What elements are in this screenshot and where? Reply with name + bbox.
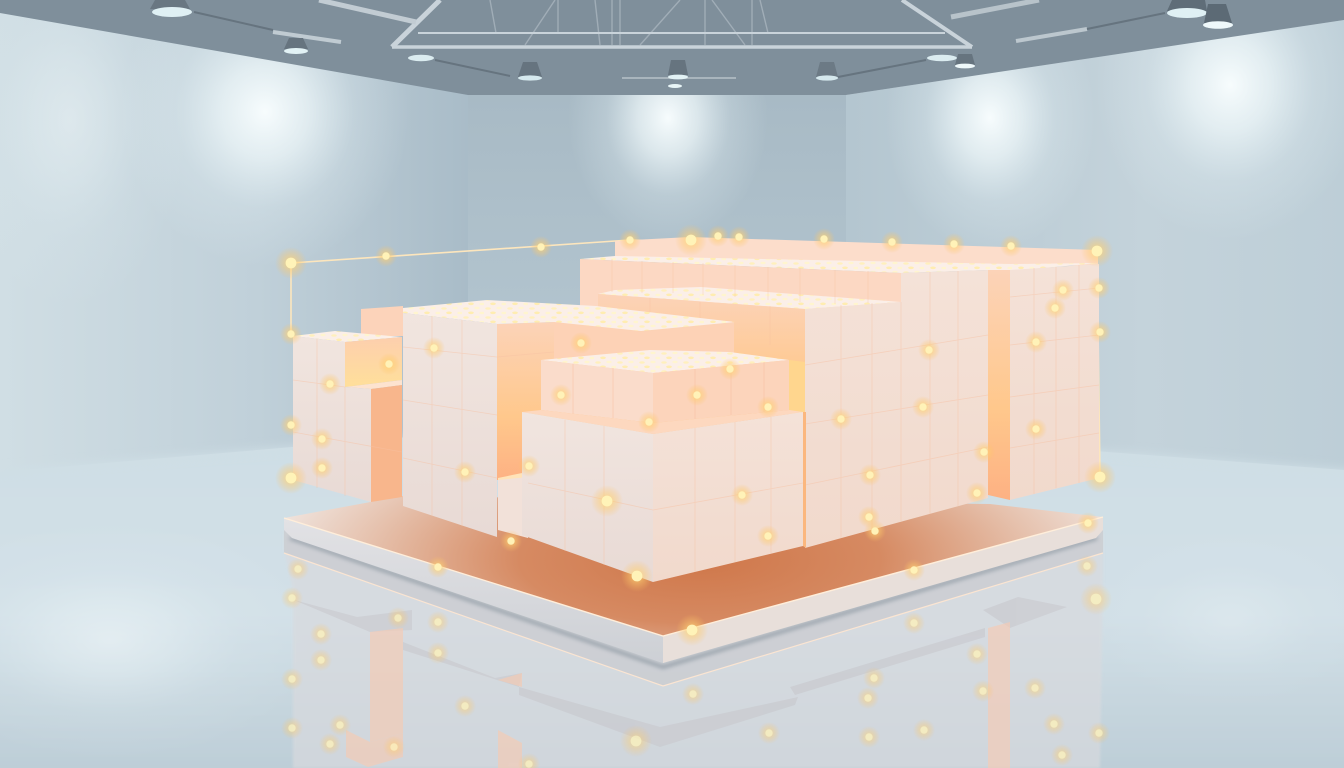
reflection: dark underside strips xyxy=(294,597,1067,747)
right block: orange gap xyxy=(988,270,1010,500)
wire frame outline xyxy=(291,240,1100,477)
platform: glowing rim xyxy=(284,517,1103,636)
platform: right side xyxy=(663,517,1103,663)
front block xyxy=(522,410,806,582)
right wall xyxy=(846,20,1344,470)
glowing lights on the model xyxy=(275,224,1116,646)
platform: contact shadow xyxy=(290,538,1097,667)
reflection: soft body of the model xyxy=(284,530,1103,768)
right block: face xyxy=(1010,264,1099,500)
back tier of blocks xyxy=(580,237,1099,440)
floor xyxy=(0,432,1344,768)
reflection: lights xyxy=(281,555,1112,768)
reflection: platform rim line xyxy=(284,553,1103,686)
left wall xyxy=(0,13,468,472)
platform: top surface xyxy=(284,496,1103,636)
far-left block xyxy=(293,306,403,502)
centre upper block xyxy=(541,350,805,423)
middle-left block xyxy=(403,300,735,537)
reflection: platform band xyxy=(284,530,1103,686)
floor reflection of the model xyxy=(281,530,1112,768)
small step block xyxy=(498,473,528,538)
ceiling lamps xyxy=(150,0,1233,88)
ceiling truss xyxy=(392,0,972,47)
platform xyxy=(284,496,1103,667)
ceiling light bars xyxy=(194,0,1165,78)
ceiling xyxy=(0,0,1344,95)
main block right face xyxy=(805,270,988,548)
reflection: orange strips xyxy=(346,622,1010,768)
right block xyxy=(988,264,1099,500)
back wall xyxy=(468,95,846,432)
platform: left side xyxy=(284,518,663,663)
